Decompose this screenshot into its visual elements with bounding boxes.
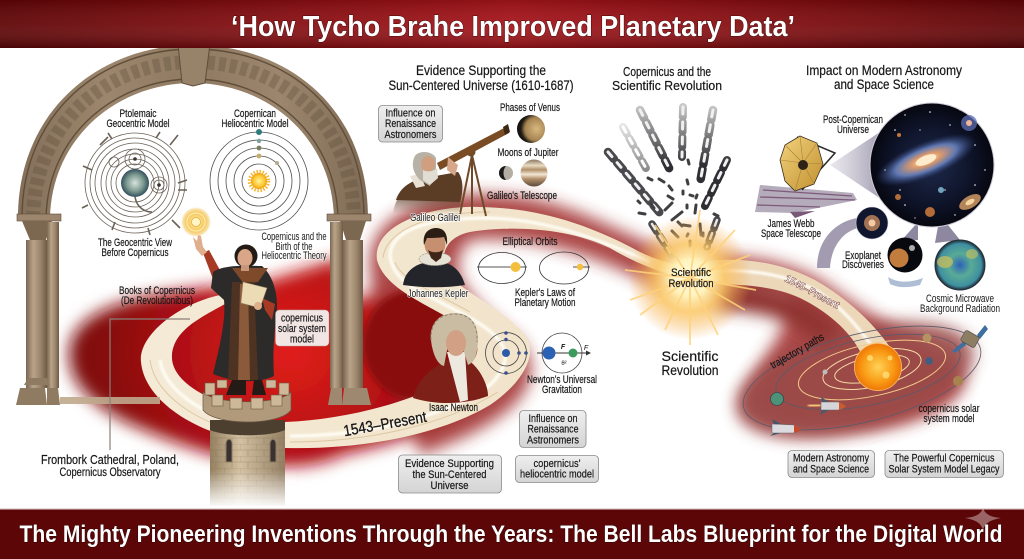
callout: The Powerful Copernicus Solar System Model Legacy: The Powerful Copernicus [894,452,995,464]
callout: Evidence Supporting the Sun-Centered Universe: Evidence Supporting [405,458,494,470]
heading: Evidence Supporting the Sun-Centered Universe: Sun-Centered Universe (1610-1687) [388,78,574,93]
panel: Ptolemaic geocentric model: Before Copernicus [102,247,169,259]
illustration: galaxy circle, Post-Copernican Universe: Universe [837,124,869,136]
callout: Influence on Renaissance Astronomers, lower: Astronomers [527,434,580,446]
callout: copernicus' heliocentric model: copernicus' [534,458,580,470]
callout: Evidence Supporting the Sun-Centered Universe [398,455,502,493]
title banner: ‘How Tycho Brahe Improved Planetary Data’ [231,11,795,43]
label: Copernicus and the birth of the heliocentric theory [262,231,327,262]
callout: Influence on Renaissance Astronomers, top: Astronomers [384,129,437,141]
label: Kepler's Laws of Planetary Motion [514,287,576,309]
callout: copernicus' heliocentric model [516,456,598,482]
icon: Cosmic Microwave Background Radiation: Background Radiation [920,303,1000,315]
heading: Impact on Modern Astronomy and Space Science: and Space Science [834,77,934,92]
illustration: Scientific Revolution starburst: Revolution [668,278,714,290]
label: Books of Copernicus [119,285,195,307]
icon: Exoplanet Discoveries [842,238,922,272]
label: Scientific Revolution [662,349,719,378]
panel: Copernican heliocentric model: Copernican [234,108,276,120]
icon: Exoplanet Discoveries: Exoplanet [845,250,881,262]
callout: Frombork with leader line [41,319,190,479]
label: Newton's Universal Gravitation [527,374,597,396]
heading: Impact on Modern Astronomy and Space Science [806,63,962,92]
callout: Influence on Renaissance Astronomers, lower: Influence on [528,413,578,425]
label: 1545–Present: 1545–Present [783,274,841,311]
icon: small galaxy [856,207,888,239]
illustration: Johannes Kepler [403,228,465,287]
icon: glowing solar model held up by Copernicus [181,207,211,237]
callout: Frombork with leader line: Frombork Cathedral, Poland, [41,452,179,467]
label: Galileo Galilei: Galileo Galilei [410,212,460,224]
illustration: James Webb Space Telescope [755,136,857,240]
right column [327,214,371,405]
icon: Cosmic Microwave Background Radiation [920,240,1000,315]
panel: Ptolemaic geocentric model [82,108,187,259]
label: Galileo's Telescope: Galileo's Telescope [487,190,557,202]
left column [16,214,61,405]
panel: Ptolemaic geocentric model: Ptolemaic [120,108,157,120]
callout: Modern Astronomy and Space Science [788,450,874,478]
illustration: breaking chains [608,107,727,257]
icon: moons of Jupiter [498,147,559,186]
icon: phases of Venus [500,102,560,143]
label: Books of Copernicus: (De Revolutionibus) [121,295,193,307]
ribbon timeline [141,207,892,448]
icon: moons of Jupiter: Moons of Jupiter [498,147,559,159]
diagram: universal gravitation: F [561,344,566,351]
keystone [178,44,210,86]
callout: Influence on Renaissance Astronomers, lower [520,410,586,448]
arch with columns [16,44,371,405]
illustration: James Webb Space Telescope: Space Telescope [761,228,821,240]
illustration: Isaac Newton [413,313,488,403]
diagram: elliptical orbits [477,236,590,284]
red background field behind the ribbon [69,194,986,466]
panel: Ptolemaic geocentric model: Geocentric Model [106,118,170,130]
diagram: universal gravitation: θ² [561,361,567,367]
callout: Evidence Supporting the Sun-Centered Universe: Universe [430,480,468,492]
callout: The Powerful Copernicus Solar System Model Legacy: Solar System Model Legacy [888,464,1000,476]
callout: copernicus solar system model: copernicus [281,312,323,324]
label: Newton's Universal Gravitation: Gravitation [542,384,582,396]
callout: Frombork with leader line: Copernicus Observatory [60,467,161,479]
panel: Copernican heliocentric model [210,108,308,230]
callout: The Powerful Copernicus Solar System Model Legacy [885,450,1004,478]
illustration: Frombork tower [200,380,296,508]
label: 1543–Present: 1543–Present [342,409,429,440]
label: Newton's Universal Gravitation: Newton's Universal [527,374,597,386]
illustration: Copernicus figure [193,235,277,395]
label: Scientific Revolution: Revolution [662,363,718,378]
label: Books of Copernicus: Books of Copernicus [119,285,195,297]
heading: Evidence Supporting the Sun-Centered Universe: Evidence Supporting the [416,63,546,78]
panel: Ptolemaic geocentric model: The Geocentric View [98,237,172,249]
label: Copernicus and the birth of the heliocentric theory: Copernicus and the [262,231,326,243]
diagram: solar system orbits: system model [924,413,974,425]
heading: Copernicus and the Scientific Revolution [612,65,722,93]
callout: Modern Astronomy and Space Science: and Space Science [793,464,869,476]
icon: Cosmic Microwave Background Radiation: Cosmic Microwave [926,293,994,305]
callout: copernicus solar system model: solar system [278,323,326,335]
illustration: galaxy circle, Post-Copernican Universe: Post-Copernican [823,114,883,126]
illustration: Scientific Revolution starburst [625,210,756,345]
label: Copernicus and the birth of the heliocentric theory: Birth of the [276,241,312,253]
diagram: solar system orbits: copernicus solar [918,403,980,415]
heading: Evidence Supporting the Sun-Centered Universe [388,63,574,93]
diagram: universal gravitation [537,333,591,373]
footer banner [0,508,1024,559]
icon: Exoplanet Discoveries: Discoveries [842,259,884,271]
diagram: elliptical orbits: Elliptical Orbits [502,236,558,248]
label: Kepler's Laws of Planetary Motion: Planetary Motion [514,297,576,309]
icon: satellite [952,325,988,353]
callout: Evidence Supporting the Sun-Centered Universe: the Sun-Centered [412,469,486,481]
icon: corner sparkle [965,508,1001,530]
label: Copernicus and the birth of the heliocentric theory: Heliocentric Theory [262,250,327,262]
label: Johannes Kepler: Johannes Kepler [408,288,469,300]
heading: Copernicus and the Scientific Revolution: Scientific Revolution [612,79,722,93]
illustration: Galileo with telescope [393,124,510,216]
callout: copernicus solar system model: model [290,334,314,346]
diagram: solar system orbits: trajectory paths [769,331,827,372]
callout: Influence on Renaissance Astronomers, top: Renaissance [385,118,436,130]
heading: Impact on Modern Astronomy and Space Science: Impact on Modern Astronomy [806,63,962,78]
label: Isaac Newton: Isaac Newton [429,402,478,414]
icon: rocket, upper [808,397,846,415]
title banner [0,0,1024,48]
illustration: James Webb Space Telescope: James Webb [768,218,814,230]
arrows: link cones to galaxy [817,132,960,287]
callout: Modern Astronomy and Space Science: Modern Astronomy [793,452,869,464]
callout: copernicus solar system model [276,310,329,346]
diagram: Newton orbit rings [486,331,528,375]
heading: Copernicus and the Scientific Revolution: Copernicus and the [623,65,711,79]
callout: Influence on Renaissance Astronomers, top: Influence on [386,108,436,120]
icon: phases of Venus: Phases of Venus [500,102,560,114]
callout: Influence on Renaissance Astronomers, lower: Renaissance [528,424,578,436]
diagram: universal gravitation: F [584,345,589,352]
illustration: galaxy circle, Post-Copernican Universe [823,103,994,227]
illustration: Scientific Revolution starburst: Scientific [671,267,712,279]
callout: copernicus' heliocentric model: heliocentric model [520,468,594,480]
label: Kepler's Laws of Planetary Motion: Kepler's Laws of [515,287,576,299]
diagram: solar system orbits [733,306,991,450]
callout: Influence on Renaissance Astronomers, top [378,106,442,142]
panel: Copernican heliocentric model: Heliocentric Model [222,118,288,130]
icon: rocket, lower [757,419,801,436]
label: Scientific Revolution: Scientific [662,349,719,364]
